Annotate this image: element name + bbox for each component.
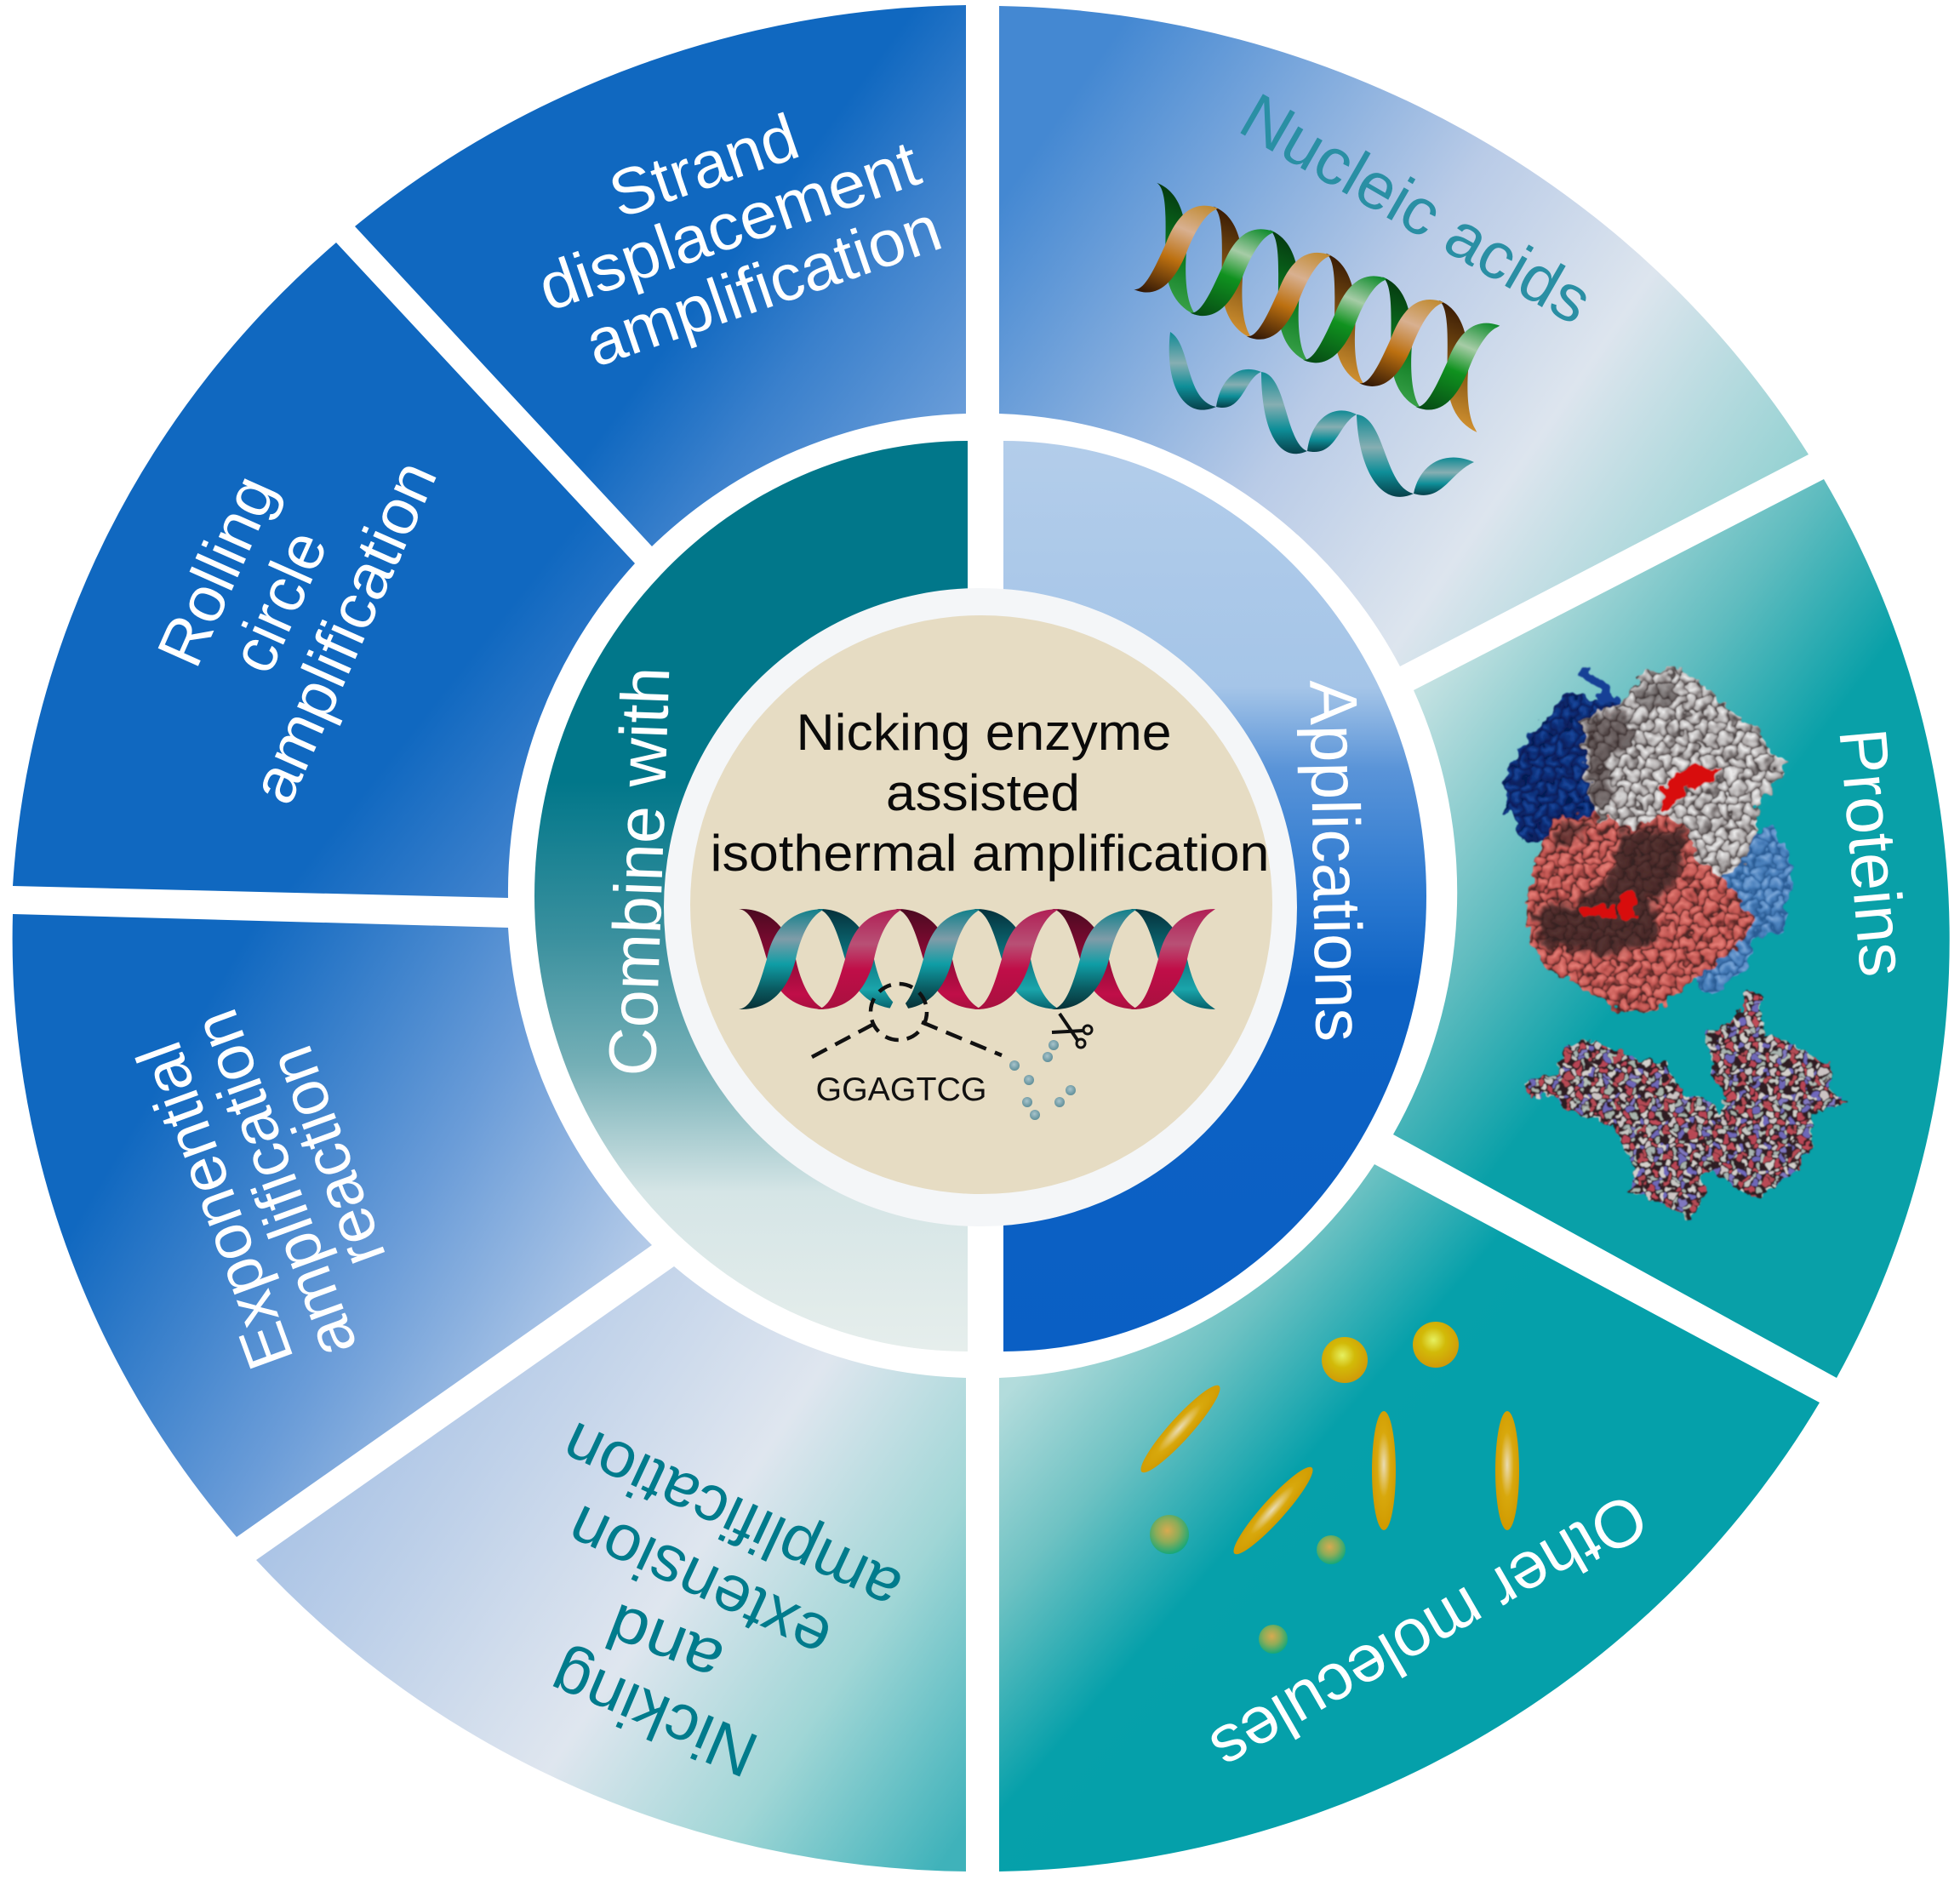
icon: gold nanoparticles and nanorods <box>1134 1322 1519 1654</box>
label: rolling circle amplification: amplification <box>236 450 450 814</box>
title: nicking enzyme assisted isothermal amplification: isothermal amplification <box>710 825 1270 882</box>
label: exponential amplification reaction: Exponential <box>123 1033 308 1379</box>
icon: small protein speckled model <box>1523 989 1849 1220</box>
title: nicking enzyme assisted isothermal amplification: assisted <box>886 764 1080 821</box>
label: nicking and extension amplification: and <box>597 1589 733 1699</box>
panel: other molecules <box>999 1164 1820 1871</box>
label: nicking and extension amplification: extension <box>557 1491 842 1675</box>
panel: exponential amplification reaction <box>13 914 652 1537</box>
label: nicking and extension amplification: Nicking <box>540 1640 768 1791</box>
icon: scissors <box>1052 1014 1092 1048</box>
label: nucleic acids: Nucleic acids <box>1228 79 1604 339</box>
highlight: red active sites <box>1579 764 1722 919</box>
title: nicking enzyme assisted isothermal amplification: Nicking enzyme <box>797 704 1171 761</box>
label: combine with: Combine with <box>594 666 683 1077</box>
label: strand displacement amplification: amplification <box>576 191 950 381</box>
label: rolling circle amplification: circle <box>216 520 341 683</box>
shading: dark recesses <box>1530 681 1685 954</box>
label: strand displacement amplification <box>508 66 951 390</box>
icon: dashed recognition site callout <box>812 984 1002 1057</box>
panel: proteins <box>1393 479 1950 1378</box>
label: exponential amplification reaction <box>123 1001 400 1379</box>
title: nicking enzyme assisted isothermal amplification <box>710 704 1270 882</box>
label: recognition sequence: GGAGTCG <box>815 1071 987 1108</box>
icon: DNA double helix red and teal <box>739 909 1215 1013</box>
label: nicking and extension amplification <box>540 1408 911 1791</box>
icon: large protein space-filling model <box>1505 669 1794 1014</box>
label: strand displacement amplification: Strand <box>600 100 808 232</box>
panel: nucleic acids <box>999 6 1809 666</box>
label: exponential amplification reaction: amplification <box>179 1001 371 1367</box>
label: strand displacement amplification: displacement <box>529 127 929 325</box>
ring segment: applications <box>1003 441 1426 1351</box>
ring segment: combine with <box>534 441 968 1351</box>
label: other molecules: Other molecules <box>1199 1479 1660 1788</box>
panel: rolling circle amplification <box>13 243 635 898</box>
label: applications: Applications <box>1295 679 1378 1043</box>
center hub <box>664 588 1297 1226</box>
label: rolling circle amplification <box>143 450 450 814</box>
label: rolling circle amplification: Rolling <box>143 465 289 677</box>
icon: double helix orange and green <box>1134 183 1500 432</box>
label: exponential amplification reaction: reaction <box>254 1037 400 1276</box>
icon: released fragment dots <box>1009 1040 1076 1120</box>
label: proteins: Proteins <box>1825 725 1922 980</box>
panel: strand displacement amplification <box>355 5 966 546</box>
panel: nicking and extension amplification <box>256 1266 966 1871</box>
label: nicking and extension amplification: amplification <box>551 1408 911 1627</box>
icon: single strand ribbon <box>1169 332 1474 497</box>
